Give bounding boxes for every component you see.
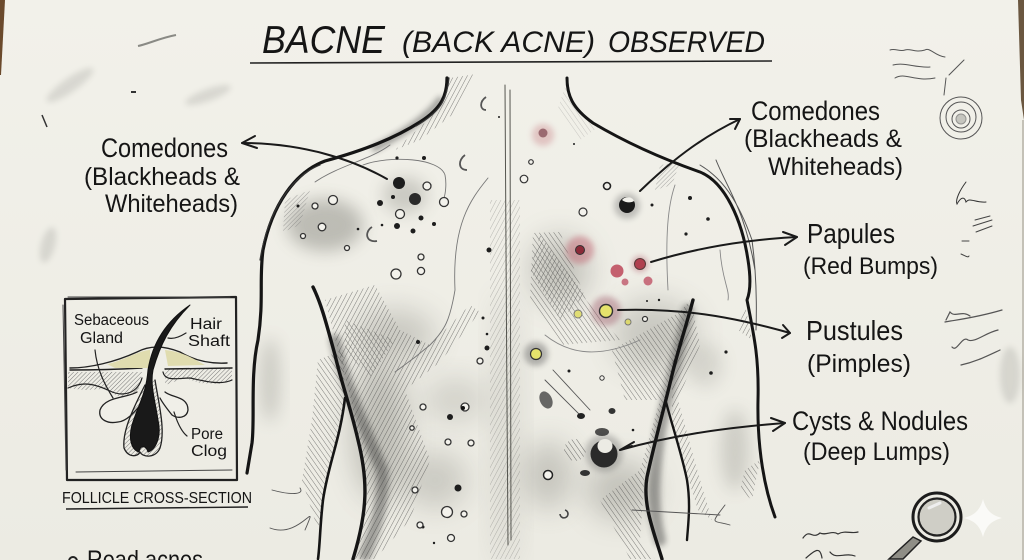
icon: magnifying glass [889, 493, 961, 559]
arrow: papules [651, 232, 797, 262]
label: comedones right [744, 96, 903, 181]
label: pustules: (Pimples) [807, 350, 911, 378]
cysts and nodules [537, 376, 623, 518]
follicle labels: Gland [80, 330, 123, 347]
label: papules: Papules [807, 218, 895, 249]
label: papules: (Red Bumps) [803, 253, 938, 280]
title: (BACK ACNE) [402, 26, 595, 59]
label: papules [803, 218, 938, 280]
label: pustules: Pustules [806, 315, 903, 346]
frame [65, 297, 237, 480]
label: comedones left: Whiteheads) [105, 190, 238, 218]
icon: sparkle [964, 499, 1002, 537]
hair shaft and bulb [130, 305, 190, 452]
label: comedones left: Comedones [101, 133, 228, 163]
hatching [283, 74, 760, 559]
margin doodles [803, 49, 1002, 558]
red papules [532, 124, 652, 286]
arrow: comedones left [242, 136, 387, 179]
shading smudges [260, 177, 749, 560]
torso and arm lines [313, 287, 365, 559]
shoulder left outline [247, 78, 447, 473]
shoulder blade lines [315, 145, 488, 372]
spine [505, 85, 511, 545]
follicle labels: Pore [191, 426, 223, 443]
blackheads and whiteheads: left shoulder [296, 97, 500, 544]
comedones: right shoulder [520, 143, 728, 431]
follicle labels: Clog [191, 443, 227, 460]
label: comedones right: (Blackheads & [744, 125, 902, 153]
shoulder right outline [567, 78, 775, 517]
title [250, 19, 772, 63]
title: OBSERVED [608, 26, 765, 59]
yellow pustules [524, 296, 631, 366]
label: comedones right: Whiteheads) [768, 153, 903, 181]
arrow: comedones right [640, 119, 740, 191]
label: pustules [806, 315, 911, 378]
title: BACNE [262, 19, 386, 62]
skin and hatching [68, 368, 232, 398]
arrow: cysts and nodules [620, 418, 785, 450]
leader lines [95, 333, 187, 436]
panel: follicle cross-section [63, 297, 237, 480]
follicle labels: Hair [190, 316, 222, 333]
arrow: pustules [618, 310, 790, 338]
label: comedones right: Comedones [751, 96, 880, 126]
label: cysts and nodules: Cysts & Nodules [792, 406, 968, 436]
back figure [247, 74, 775, 560]
follicle labels [74, 312, 231, 460]
follicle labels: Sebaceous [74, 312, 149, 329]
follicle sac [124, 380, 162, 456]
label: cysts and nodules [792, 406, 968, 466]
follicle labels: Shaft [188, 333, 231, 350]
follicle caption: FOLLICLE CROSS-SECTION [62, 490, 252, 507]
label: comedones left: (Blackheads & [84, 163, 240, 191]
sebaceous glands [100, 392, 143, 422]
label: cysts and nodules: (Deep Lumps) [803, 438, 950, 466]
dark pencil shading along creases [335, 100, 688, 555]
label: comedones left [84, 133, 240, 218]
